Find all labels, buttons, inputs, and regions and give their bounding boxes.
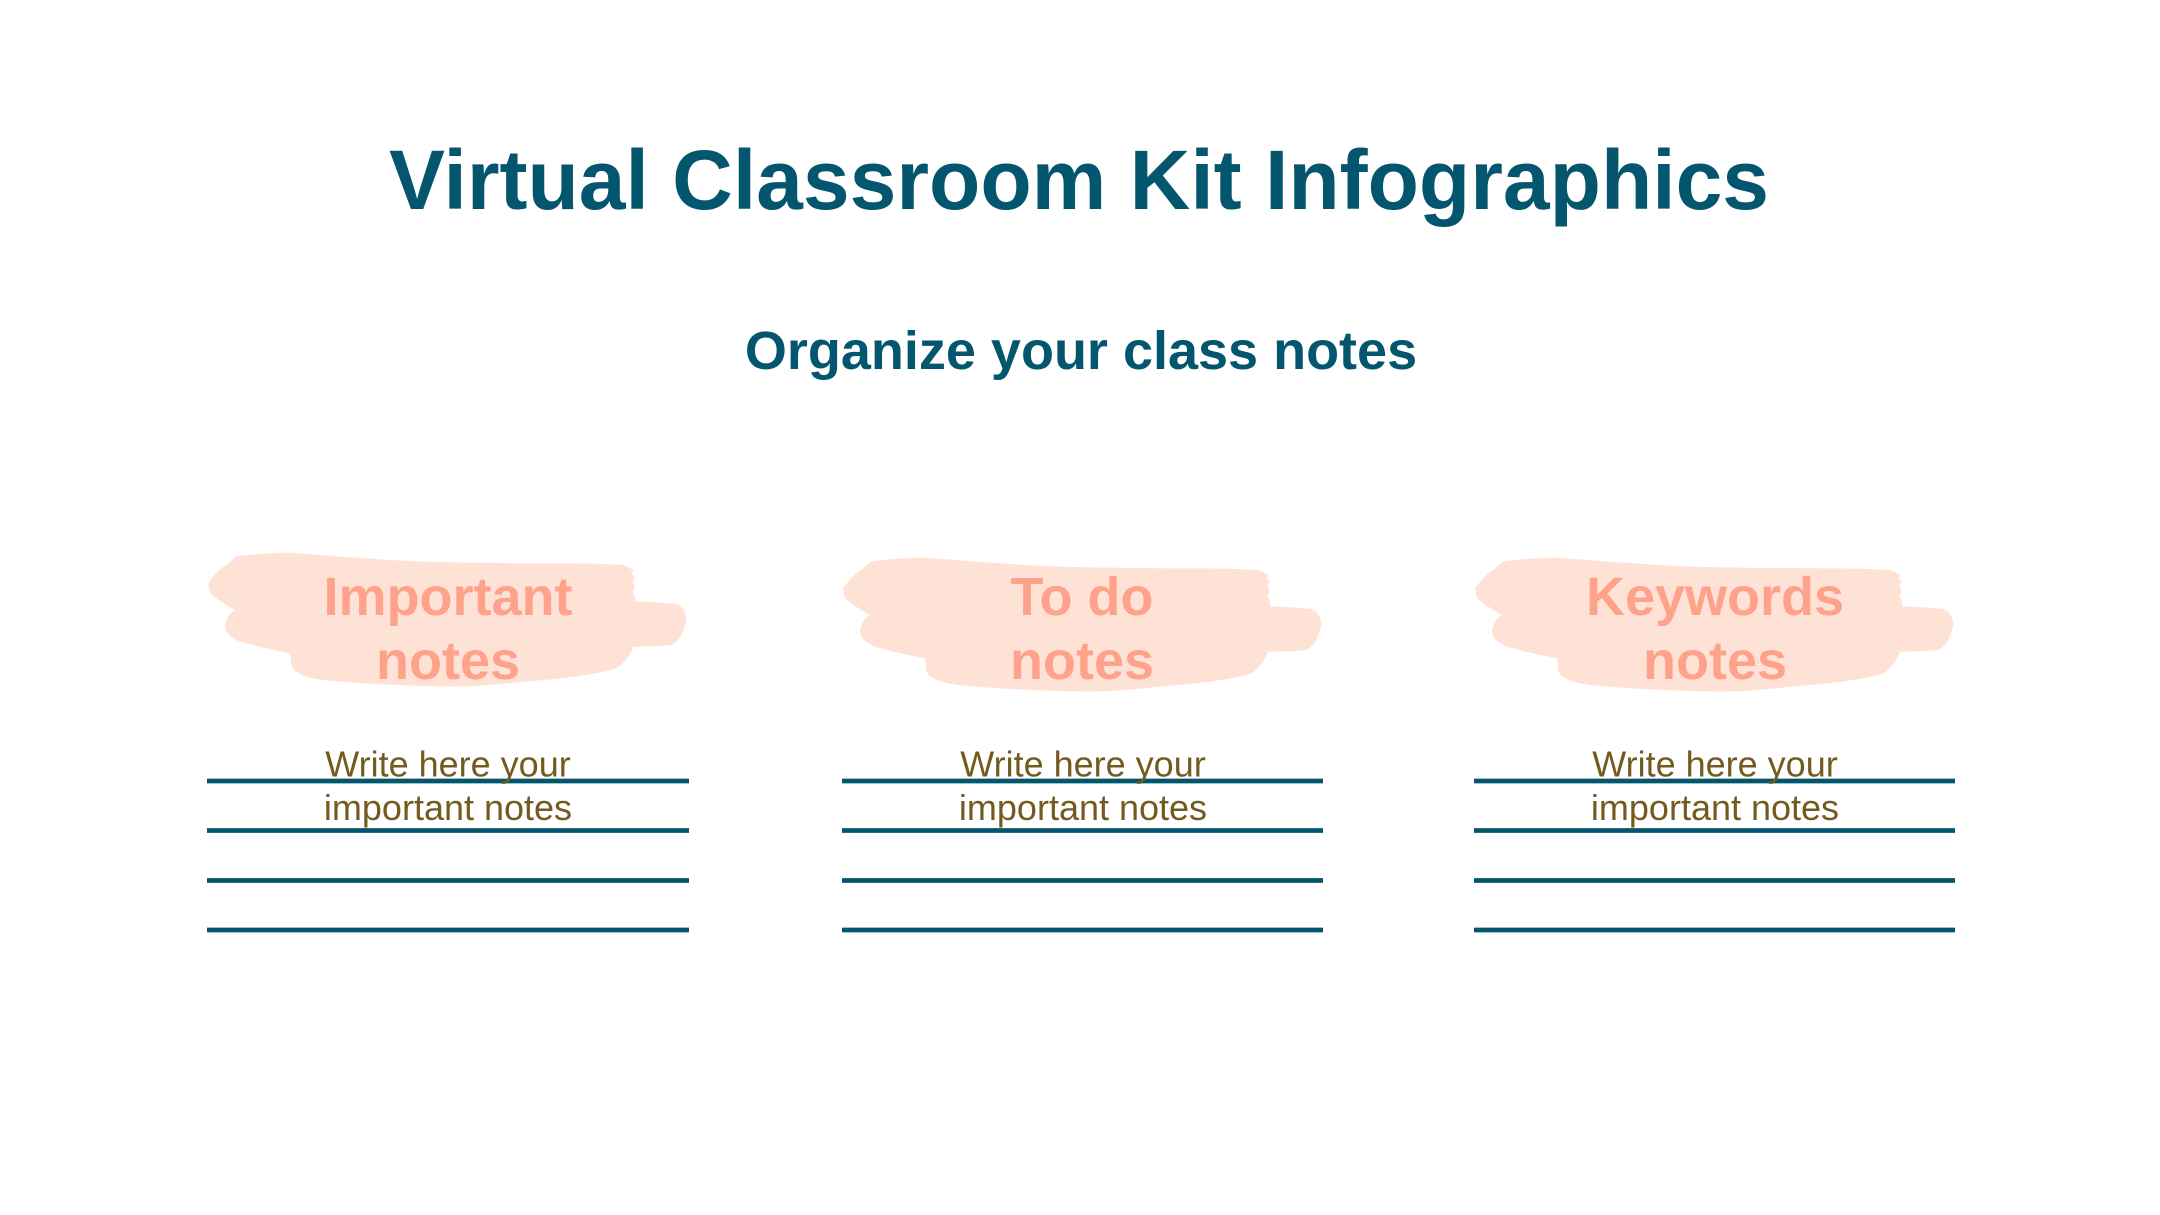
ruled lines bbox=[1474, 781, 1955, 930]
body text: Write here your bbox=[1592, 744, 1838, 784]
heading: important notes: notes bbox=[376, 631, 520, 691]
ruled lines bbox=[207, 781, 689, 930]
panel: to do notes bbox=[842, 558, 1323, 930]
body text: important notes bbox=[324, 787, 572, 828]
body text: Write here your bbox=[325, 744, 571, 784]
brush stroke: keywords notes bbox=[1475, 558, 1953, 692]
ruled lines bbox=[842, 781, 1323, 930]
subtitle: Organize your class notes bbox=[745, 321, 1417, 381]
brush stroke: important notes bbox=[208, 553, 686, 687]
body text: important notes bbox=[959, 787, 1207, 828]
heading: important notes: Important bbox=[324, 567, 573, 627]
body text: important notes bbox=[1591, 787, 1839, 828]
heading: to do notes: notes bbox=[1010, 631, 1154, 691]
body text: Write here your bbox=[960, 744, 1206, 784]
panel: keywords notes bbox=[1474, 558, 1955, 930]
title: Virtual Classroom Kit Infographics bbox=[389, 133, 1769, 227]
heading: to do notes: To do bbox=[1011, 567, 1153, 627]
heading: keywords notes: Keywords bbox=[1586, 567, 1844, 627]
brush stroke: to do notes bbox=[843, 558, 1321, 692]
heading: keywords notes: notes bbox=[1643, 631, 1787, 691]
panel: important notes bbox=[207, 553, 689, 930]
